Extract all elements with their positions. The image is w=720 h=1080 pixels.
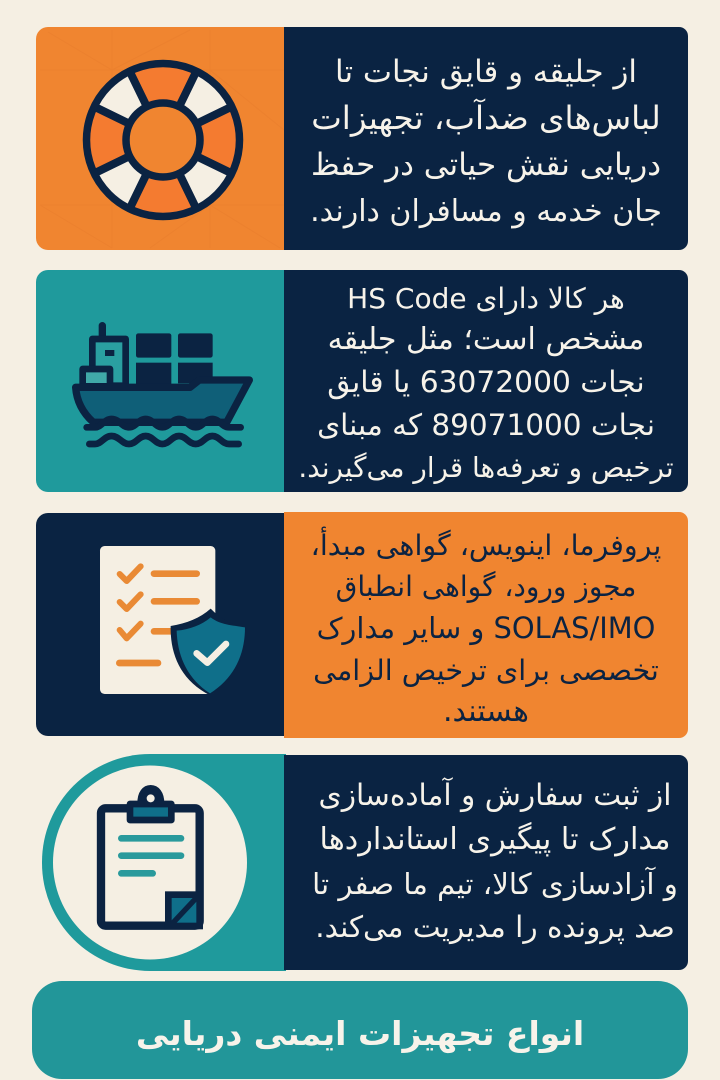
text block: required documents: پروفرما، اینویس، گواهی مبدأ، [311, 529, 661, 562]
text block: HS Code: هر کالا دارای HS Code [347, 282, 625, 315]
text block: required documents: مجوز ورود، گواهی انطباق [336, 570, 636, 603]
text block: life equipment intro: دریایی نقش حیاتی در حفظ [311, 147, 661, 183]
text block: team service: از ثبت سفارش و آماده‌سازی [319, 778, 671, 812]
text block: required documents: تخصصی برای ترخیص الزامی [313, 653, 659, 687]
text block: team service: صد پرونده را مدیریت می‌کند. [315, 910, 675, 944]
text block: HS Code: نجات 63072000 یا قایق [327, 365, 645, 400]
text block: required documents [284, 512, 688, 738]
text block: life equipment intro: جان خدمه و مسافران دارند. [310, 194, 662, 229]
text block: HS Code [284, 270, 688, 492]
panel: life ring, orange tile [36, 27, 286, 250]
text block: life equipment intro: از جلیقه و قایق نجات تا [335, 54, 637, 90]
text block: team service: مدارک تا پیگیری استانداردها [320, 822, 670, 857]
text block: life equipment intro: لباس‌های ضدآب، تجهیزات [311, 99, 661, 137]
text block: HS Code: مشخص است؛ مثل جلیقه [328, 322, 644, 357]
title: انواع تجهیزات ایمنی دریایی [136, 1014, 584, 1053]
icon: life ring [40, 30, 284, 248]
text block: team service [284, 755, 688, 970]
panel: clipboard, teal tile with cream circle [42, 754, 286, 971]
text block: HS Code: نجات 89071000 که مبنای [317, 408, 655, 442]
text block: required documents: SOLAS/IMO و سایر مدارک [317, 611, 655, 645]
text block: team service: و آزادسازی کالا، تیم ما صفر تا [312, 867, 678, 901]
text block: required documents: هستند. [443, 694, 529, 729]
text block: HS Code: ترخیص و تعرفه‌ها قرار می‌گیرند. [298, 451, 674, 484]
icon: clipboard in cream circle [53, 766, 247, 960]
title banner [32, 981, 688, 1079]
panel: ship, teal tile [36, 270, 286, 492]
text block: life equipment intro [284, 27, 688, 250]
panel: checklist, navy tile [36, 513, 286, 736]
icon: checklist with shield [100, 546, 245, 695]
icon: cargo ship [76, 326, 249, 444]
